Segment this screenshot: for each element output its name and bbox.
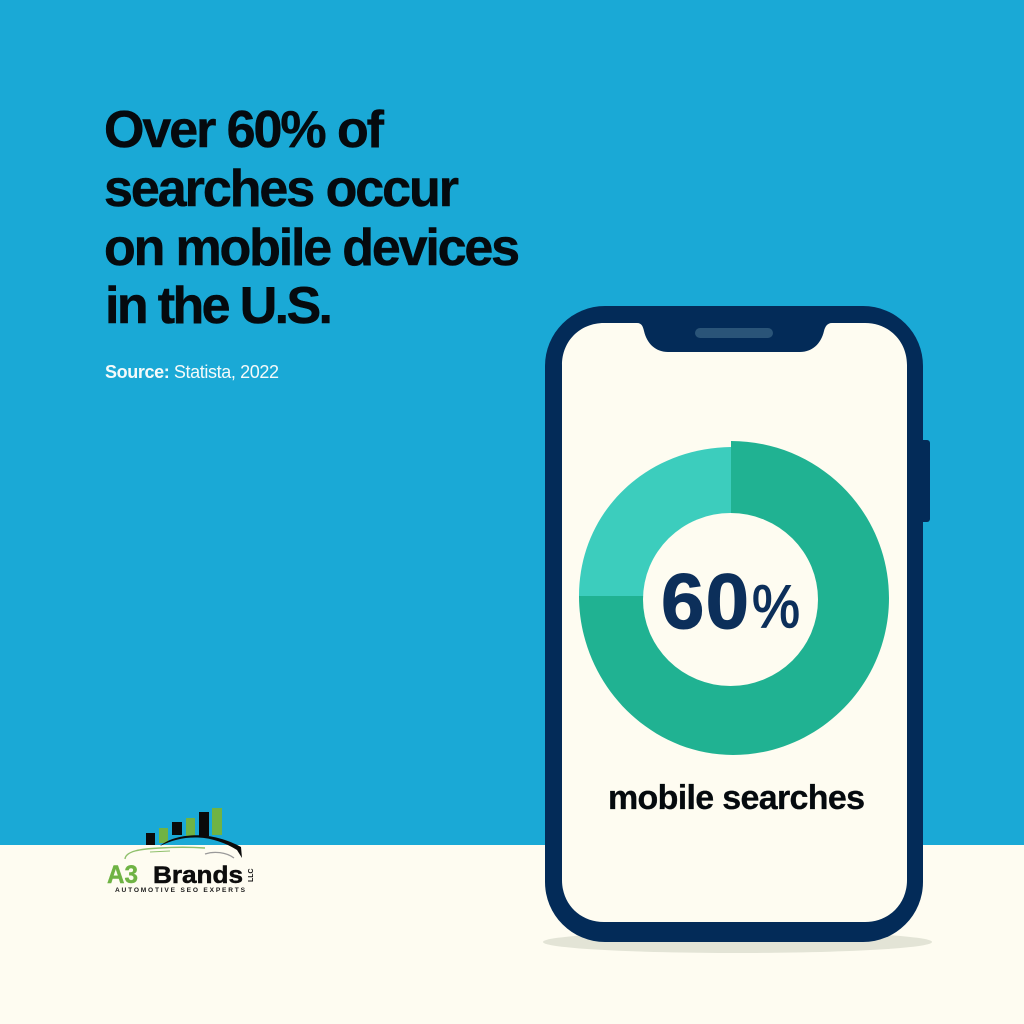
phone body (545, 306, 923, 942)
light segment 40% (579, 447, 731, 596)
logo tagline: AUTOMOTIVE SEO EXPERTS (115, 887, 246, 894)
logo: A3 Brands: Brands (153, 862, 243, 889)
logo wordmark: A3 (107, 861, 138, 889)
60% value (661, 557, 800, 645)
60% value: 60 (661, 557, 749, 645)
title: Over 60% of (104, 101, 385, 159)
logo: A3 Brands: LLC (248, 868, 255, 882)
speaker (695, 328, 773, 338)
dark segment 60% (579, 441, 889, 755)
title: in the U.S. (105, 277, 333, 335)
title: searches occur (104, 160, 459, 218)
logo car outline (125, 835, 242, 859)
logo bar chart (146, 808, 222, 845)
donut chart (579, 441, 889, 755)
phone screen (562, 323, 907, 922)
title (104, 101, 520, 335)
chart label: mobile searches (608, 779, 865, 817)
donut hole (643, 513, 818, 686)
phone (545, 306, 930, 942)
title: on mobile devices (104, 219, 520, 277)
60% value: % (752, 573, 800, 640)
phone shadow (543, 931, 932, 953)
side button (918, 440, 930, 522)
source note: Source: Statista, 2022 (105, 362, 279, 382)
logo: A3 Brands (107, 808, 255, 894)
